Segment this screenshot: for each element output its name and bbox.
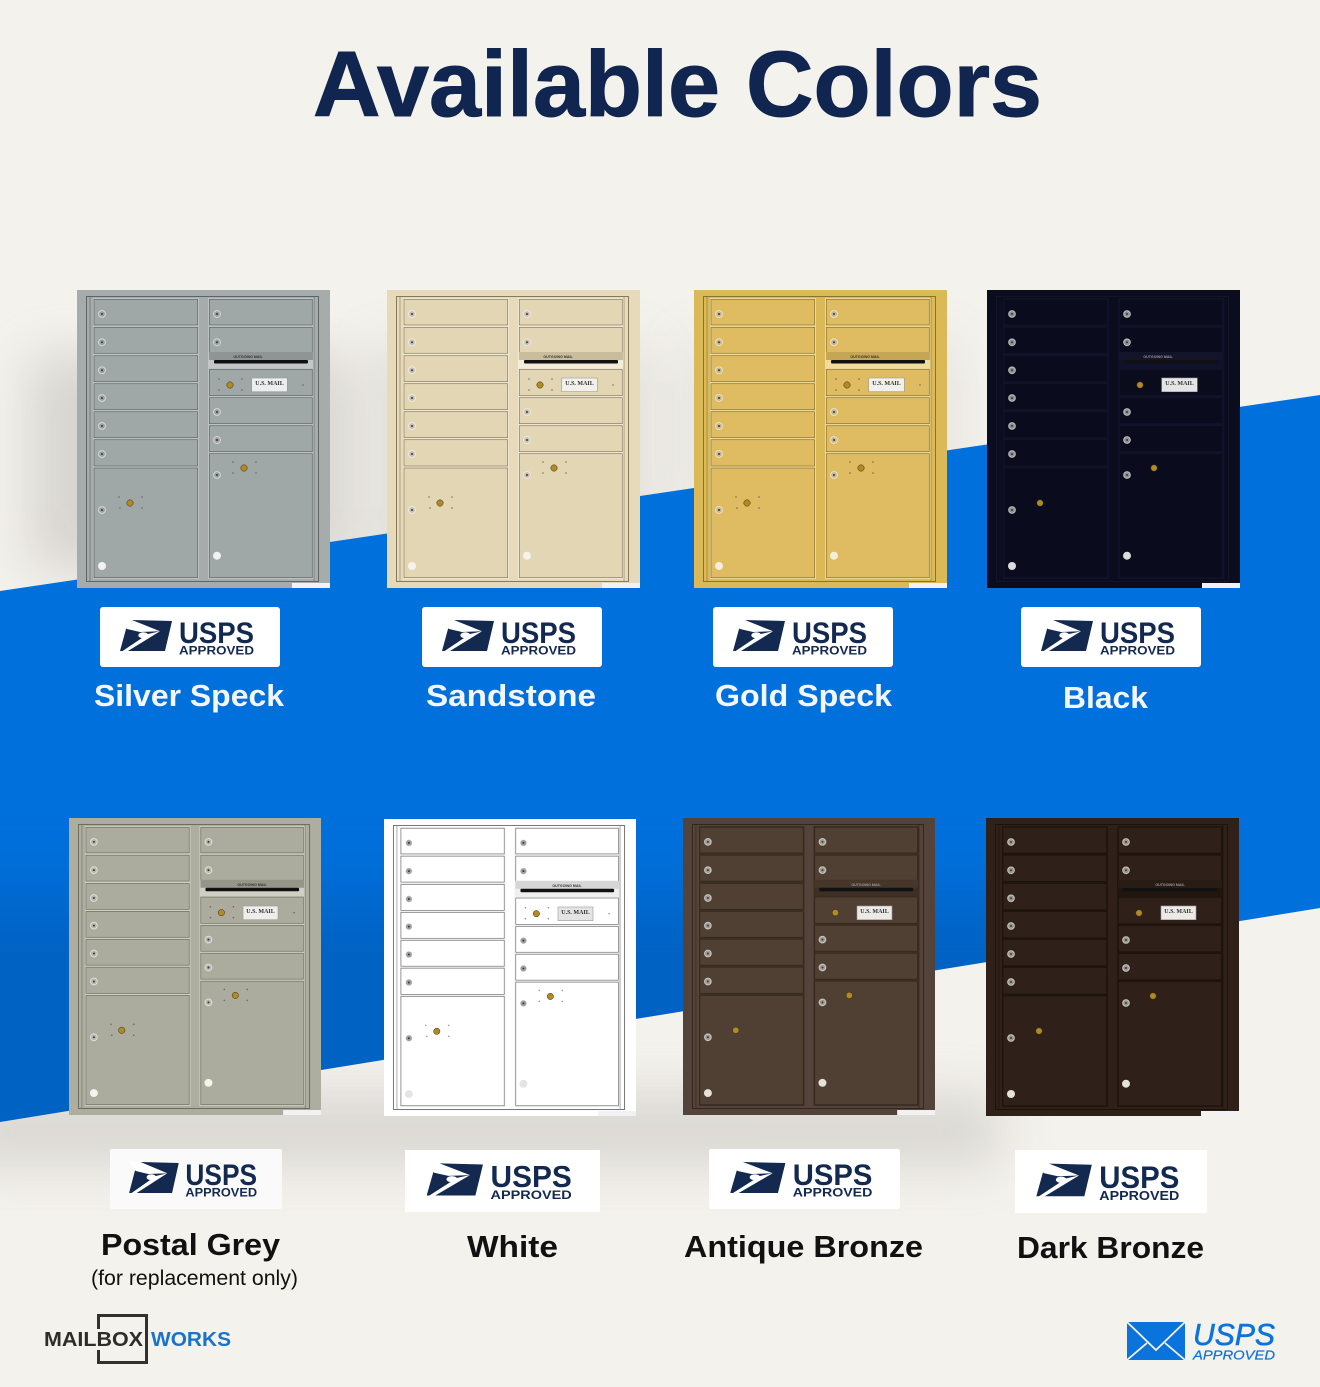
label: Gold Speck xyxy=(715,678,893,713)
mailbox unit: silver: OUTGOING MAIL xyxy=(233,355,263,359)
soft shadows on the light background xyxy=(0,340,1000,1165)
badge: USPS approved: APPROVED xyxy=(792,644,867,658)
panel: Dark Bronze xyxy=(986,818,1239,1265)
badge: USPS approved: USPS xyxy=(491,1159,572,1194)
diagonal blue band xyxy=(0,395,1320,1122)
mailbox unit: postal grey: OUTGOING MAIL xyxy=(237,883,267,887)
badge: USPS approved xyxy=(1021,607,1201,667)
badge: USPS approved: APPROVED xyxy=(793,1186,872,1199)
panel: Antique Bronze xyxy=(683,818,935,1264)
panel: Silver Speck xyxy=(77,290,330,713)
logo: USPS approved envelope xyxy=(1127,1317,1275,1362)
label: White xyxy=(467,1229,558,1264)
mailbox unit: antique bronze: OUTGOING MAIL xyxy=(851,883,881,887)
band shading behind lower row xyxy=(0,881,986,1122)
badge: USPS approved: APPROVED xyxy=(179,644,254,658)
label: Silver Speck xyxy=(94,678,285,713)
icon: envelope xyxy=(1127,1322,1185,1360)
mailbox unit: sandstone xyxy=(387,290,640,588)
mailbox unit: antique bronze: U.S. MAIL xyxy=(860,909,889,915)
badge: USPS approved: USPS xyxy=(793,1158,872,1192)
panel: Sandstone xyxy=(387,290,640,713)
badge: USPS approved: APPROVED xyxy=(1099,1189,1179,1203)
mailbox unit: silver xyxy=(77,290,330,588)
badge: USPS approved: USPS xyxy=(792,617,867,650)
mailbox unit: postal grey xyxy=(69,818,321,1115)
label: Black xyxy=(1063,680,1149,715)
badge: USPS approved xyxy=(405,1150,600,1212)
logo: USPS approved envelope: APPROVED xyxy=(1192,1348,1275,1362)
mailbox unit: gold: OUTGOING MAIL xyxy=(850,355,880,359)
mailbox unit: gold xyxy=(694,290,947,588)
mailbox unit: dark bronze xyxy=(986,818,1239,1116)
mailbox unit: white xyxy=(384,819,636,1116)
mailbox unit: dark bronze: OUTGOING MAIL xyxy=(1155,883,1185,887)
badge: USPS approved: APPROVED xyxy=(501,644,576,658)
mailbox unit: silver: U.S. MAIL xyxy=(255,381,284,387)
badge: USPS approved xyxy=(422,607,602,667)
badge: USPS approved: USPS xyxy=(1099,1159,1179,1195)
mailbox unit: black xyxy=(987,290,1240,588)
logo: Mailbox Works xyxy=(44,1316,231,1362)
mailbox unit: sandstone: U.S. MAIL xyxy=(565,381,594,387)
badge: USPS approved: USPS xyxy=(1100,617,1175,650)
logo: Mailbox Works: WORKS xyxy=(151,1329,231,1351)
mailbox unit: white: U.S. MAIL xyxy=(561,910,590,916)
label: Postal Grey xyxy=(101,1227,281,1262)
label: Dark Bronze xyxy=(1017,1230,1204,1265)
note: (for replacement only) xyxy=(91,1267,298,1290)
badge: USPS approved: USPS xyxy=(501,617,576,650)
badge: USPS approved xyxy=(713,607,893,667)
badge: USPS approved xyxy=(1015,1150,1207,1213)
badge: USPS approved: USPS xyxy=(179,617,254,650)
badge: USPS approved: APPROVED xyxy=(1100,644,1175,658)
label: Sandstone xyxy=(426,678,596,713)
mailbox unit: gold: U.S. MAIL xyxy=(872,381,901,387)
badge: USPS approved: APPROVED xyxy=(185,1186,257,1200)
panel: Postal Grey xyxy=(69,818,321,1290)
mailbox unit: sandstone: OUTGOING MAIL xyxy=(543,355,573,359)
mailbox unit: black: OUTGOING MAIL xyxy=(1143,355,1173,359)
badge: USPS approved xyxy=(100,607,280,667)
mailbox unit: black: U.S. MAIL xyxy=(1165,381,1194,387)
logo: Mailbox Works: MAILBOX xyxy=(44,1329,144,1351)
title: Available Colors xyxy=(313,32,1042,136)
badge: USPS approved: APPROVED xyxy=(491,1188,572,1202)
panel: White xyxy=(384,819,636,1264)
mailbox unit: postal grey: U.S. MAIL xyxy=(246,909,275,915)
panel: Black xyxy=(987,290,1240,715)
logo: USPS approved envelope: USPS xyxy=(1193,1317,1275,1352)
label: Antique Bronze xyxy=(684,1229,923,1264)
mailbox unit: dark bronze: U.S. MAIL xyxy=(1164,909,1193,915)
mailbox unit: white: OUTGOING MAIL xyxy=(552,884,582,888)
badge: USPS approved xyxy=(110,1149,282,1209)
badge: USPS approved: USPS xyxy=(185,1158,257,1192)
mailbox unit: antique bronze xyxy=(683,818,935,1115)
panel: Gold Speck xyxy=(694,290,947,713)
badge: USPS approved xyxy=(709,1149,900,1209)
